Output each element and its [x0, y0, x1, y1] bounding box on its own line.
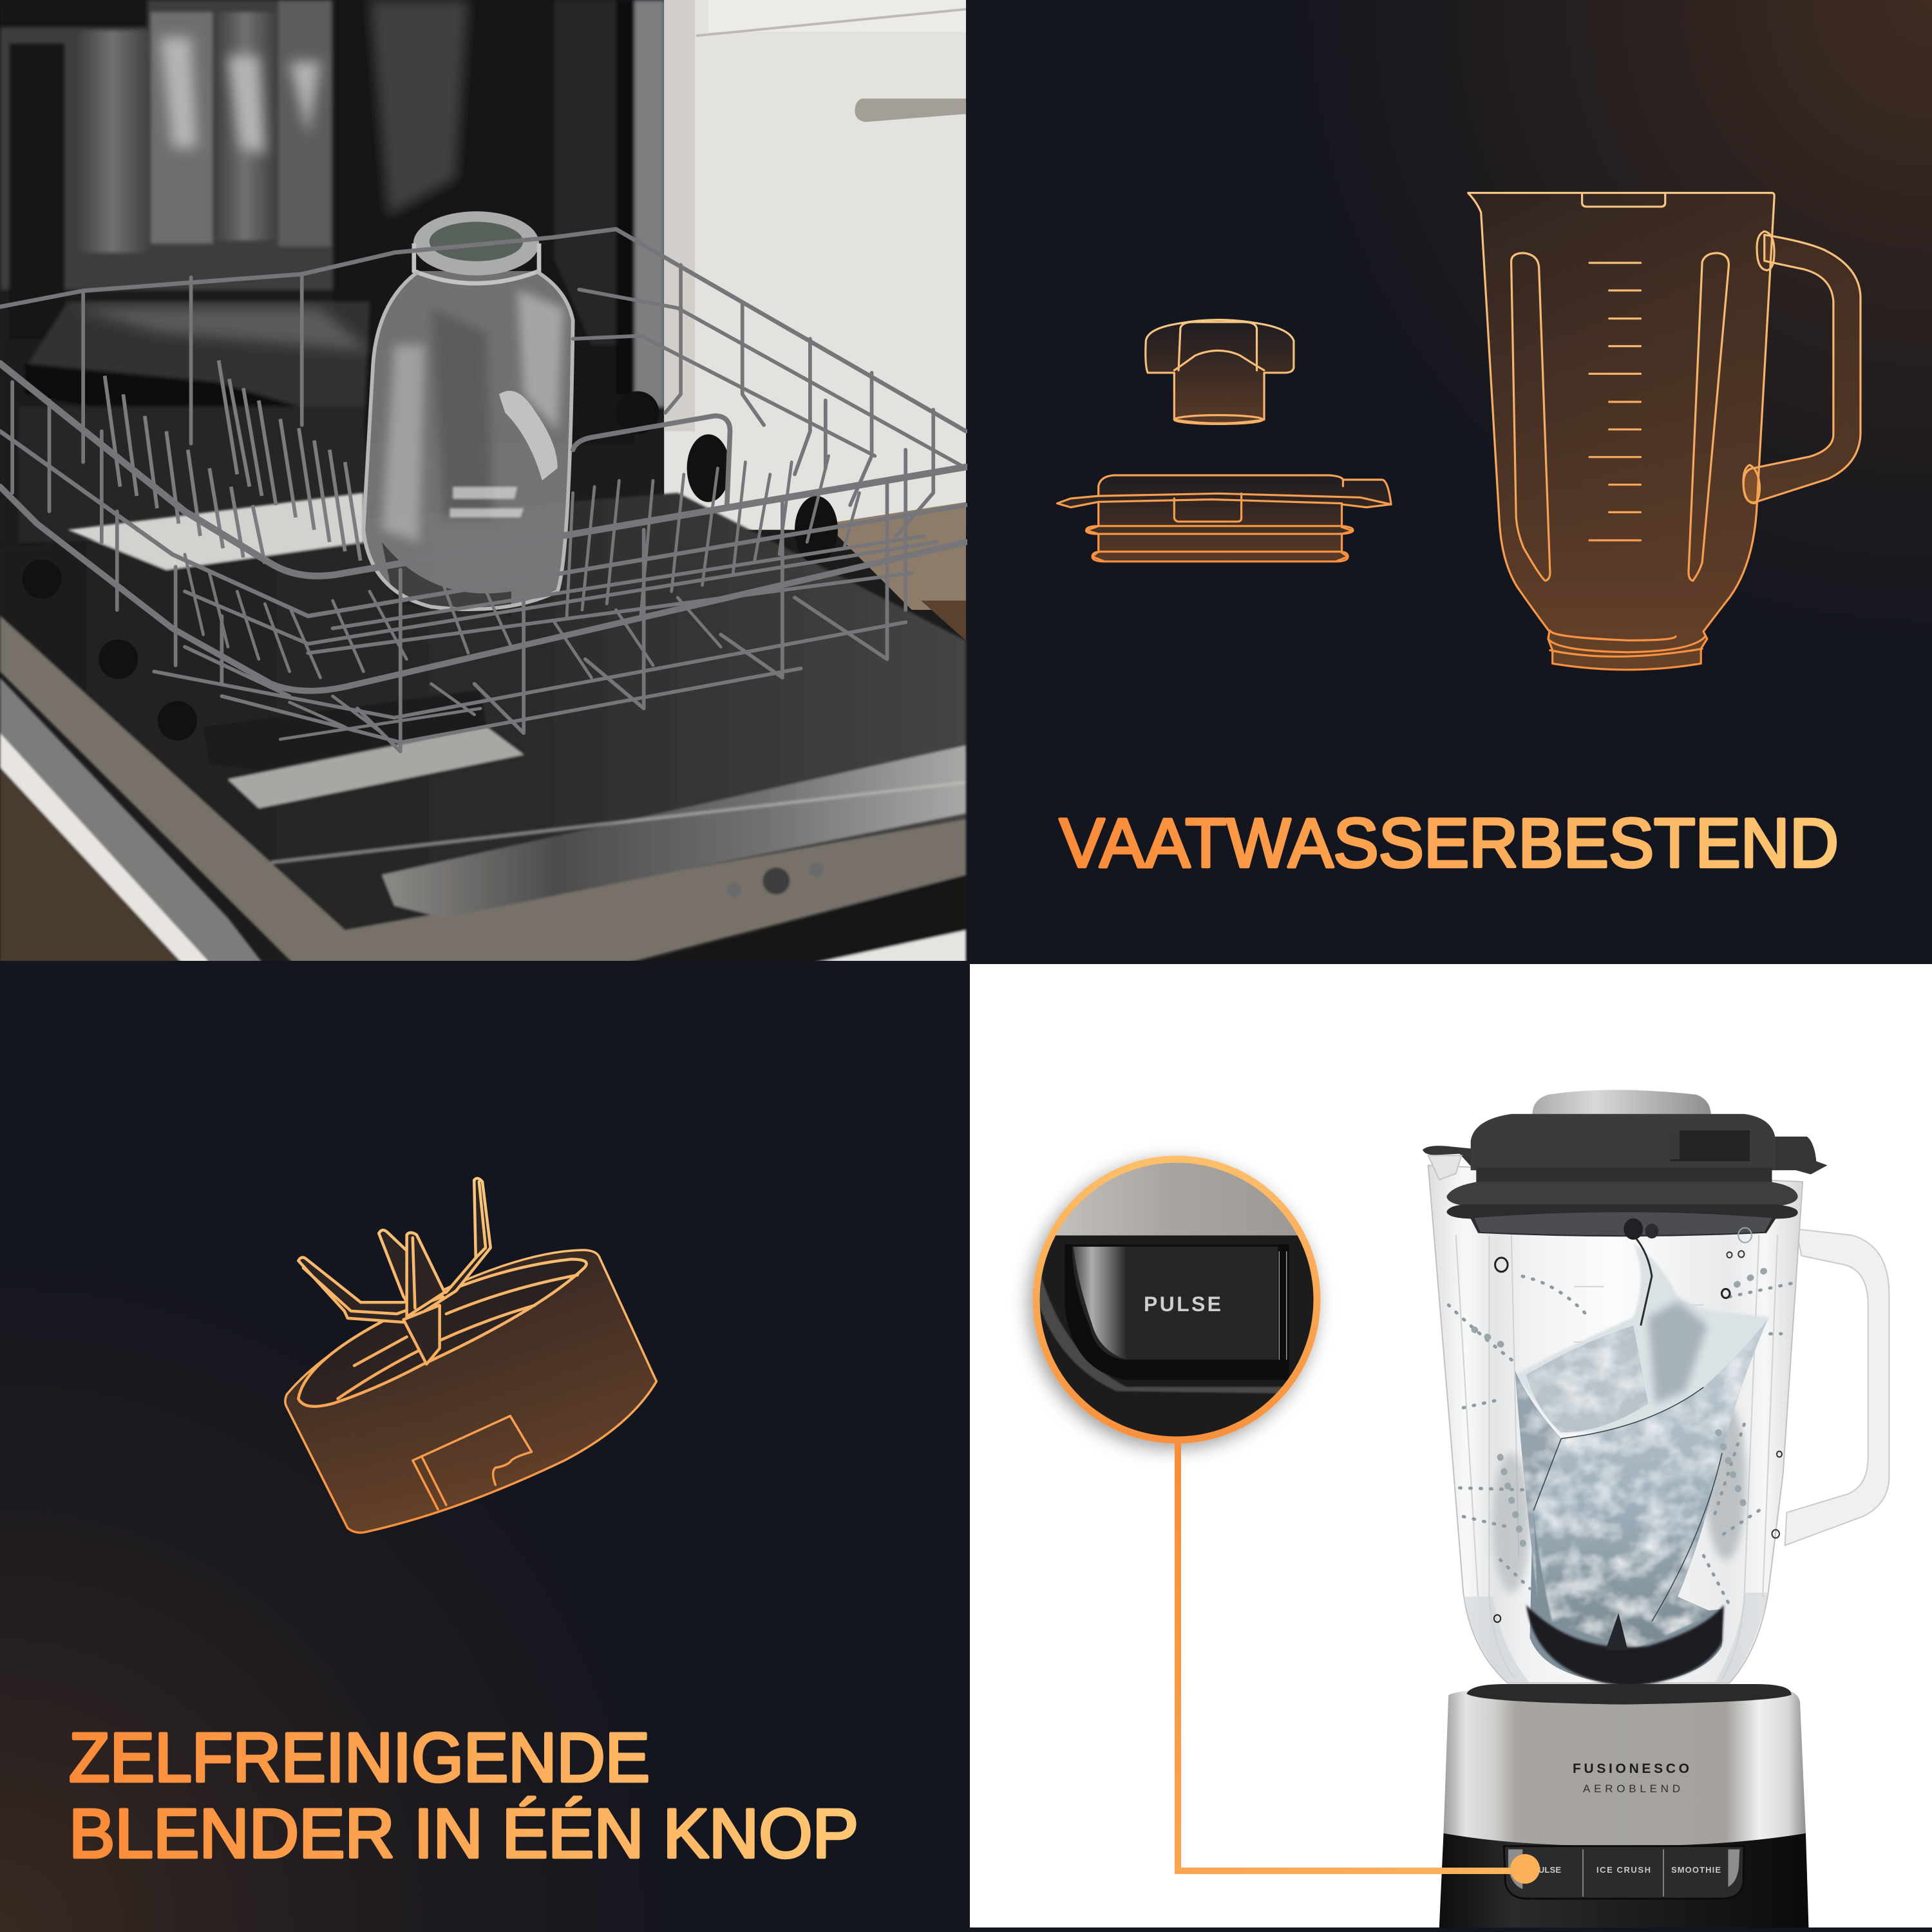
- brand name: FUSIONESCO: [1573, 1761, 1689, 1776]
- line drawings: [1057, 193, 1861, 670]
- blender jar with lid and water: [1423, 1090, 1889, 1686]
- glass jar: [1428, 1166, 1803, 1683]
- button labels: SMOOTHIE: [1671, 1865, 1721, 1875]
- black lower body: [1439, 1833, 1808, 1927]
- dish rack wires: [0, 229, 966, 752]
- heading: zelfreinigende blender in een knop: ZELFREINIGENDE: [69, 1718, 650, 1796]
- steel band: [1444, 1690, 1806, 1846]
- button labels: PULSE: [1533, 1865, 1561, 1875]
- lid: [1423, 1114, 1828, 1236]
- icon: blade assembly outline: [285, 1179, 656, 1533]
- panel: dishwasher-safe parts: [968, 0, 1932, 964]
- callout: pulse button magnifier: [1023, 1150, 1320, 1446]
- icon: blender jug outline: [1468, 193, 1861, 670]
- glass jar: [363, 211, 573, 616]
- icon: lid outline: [1057, 475, 1391, 562]
- button labels: [1533, 1865, 1721, 1875]
- kitchen cabinet: [664, 0, 966, 641]
- heading: vaatwasserbestend: VAATWASSERBESTEND: [1059, 804, 1839, 882]
- water droplets: [1448, 1276, 1796, 1605]
- connector line to button: [1178, 1443, 1520, 1871]
- handle: [1785, 1229, 1889, 1546]
- control panel: [1504, 1846, 1744, 1899]
- measurement marks: [1574, 1287, 1703, 1572]
- icon: measuring cap outline: [1146, 320, 1294, 424]
- panel: self-cleaning: [0, 964, 968, 1932]
- dishwasher interior back wall: [0, 0, 665, 679]
- blender base: [1439, 1684, 1808, 1927]
- rack wheels: [22, 391, 838, 741]
- white background: [970, 964, 1932, 1927]
- lid cap: [1532, 1090, 1711, 1116]
- pulse label: PULSE: [1144, 1293, 1221, 1316]
- black collar: [1466, 1684, 1792, 1705]
- door floor and wood: [0, 493, 966, 966]
- heading: zelfreinigende blender in een knop: [69, 1718, 858, 1872]
- heading: zelfreinigende blender in een knop: BLENDER IN ÉÉN KNOP: [69, 1794, 858, 1872]
- panel: dishwasher photo: [0, 0, 966, 966]
- panel background with corner glow: [0, 964, 968, 1932]
- spout: [1428, 1155, 1461, 1180]
- connector dot: [1510, 1854, 1540, 1884]
- water splash: [1448, 1218, 1796, 1686]
- panel background with corner glow: [968, 0, 1932, 964]
- button labels: ICE CRUSH: [1596, 1865, 1651, 1875]
- model name: AEROBLEND: [1583, 1783, 1680, 1795]
- panel: blender on white: [970, 964, 1932, 1927]
- rear dish tines: [105, 361, 361, 564]
